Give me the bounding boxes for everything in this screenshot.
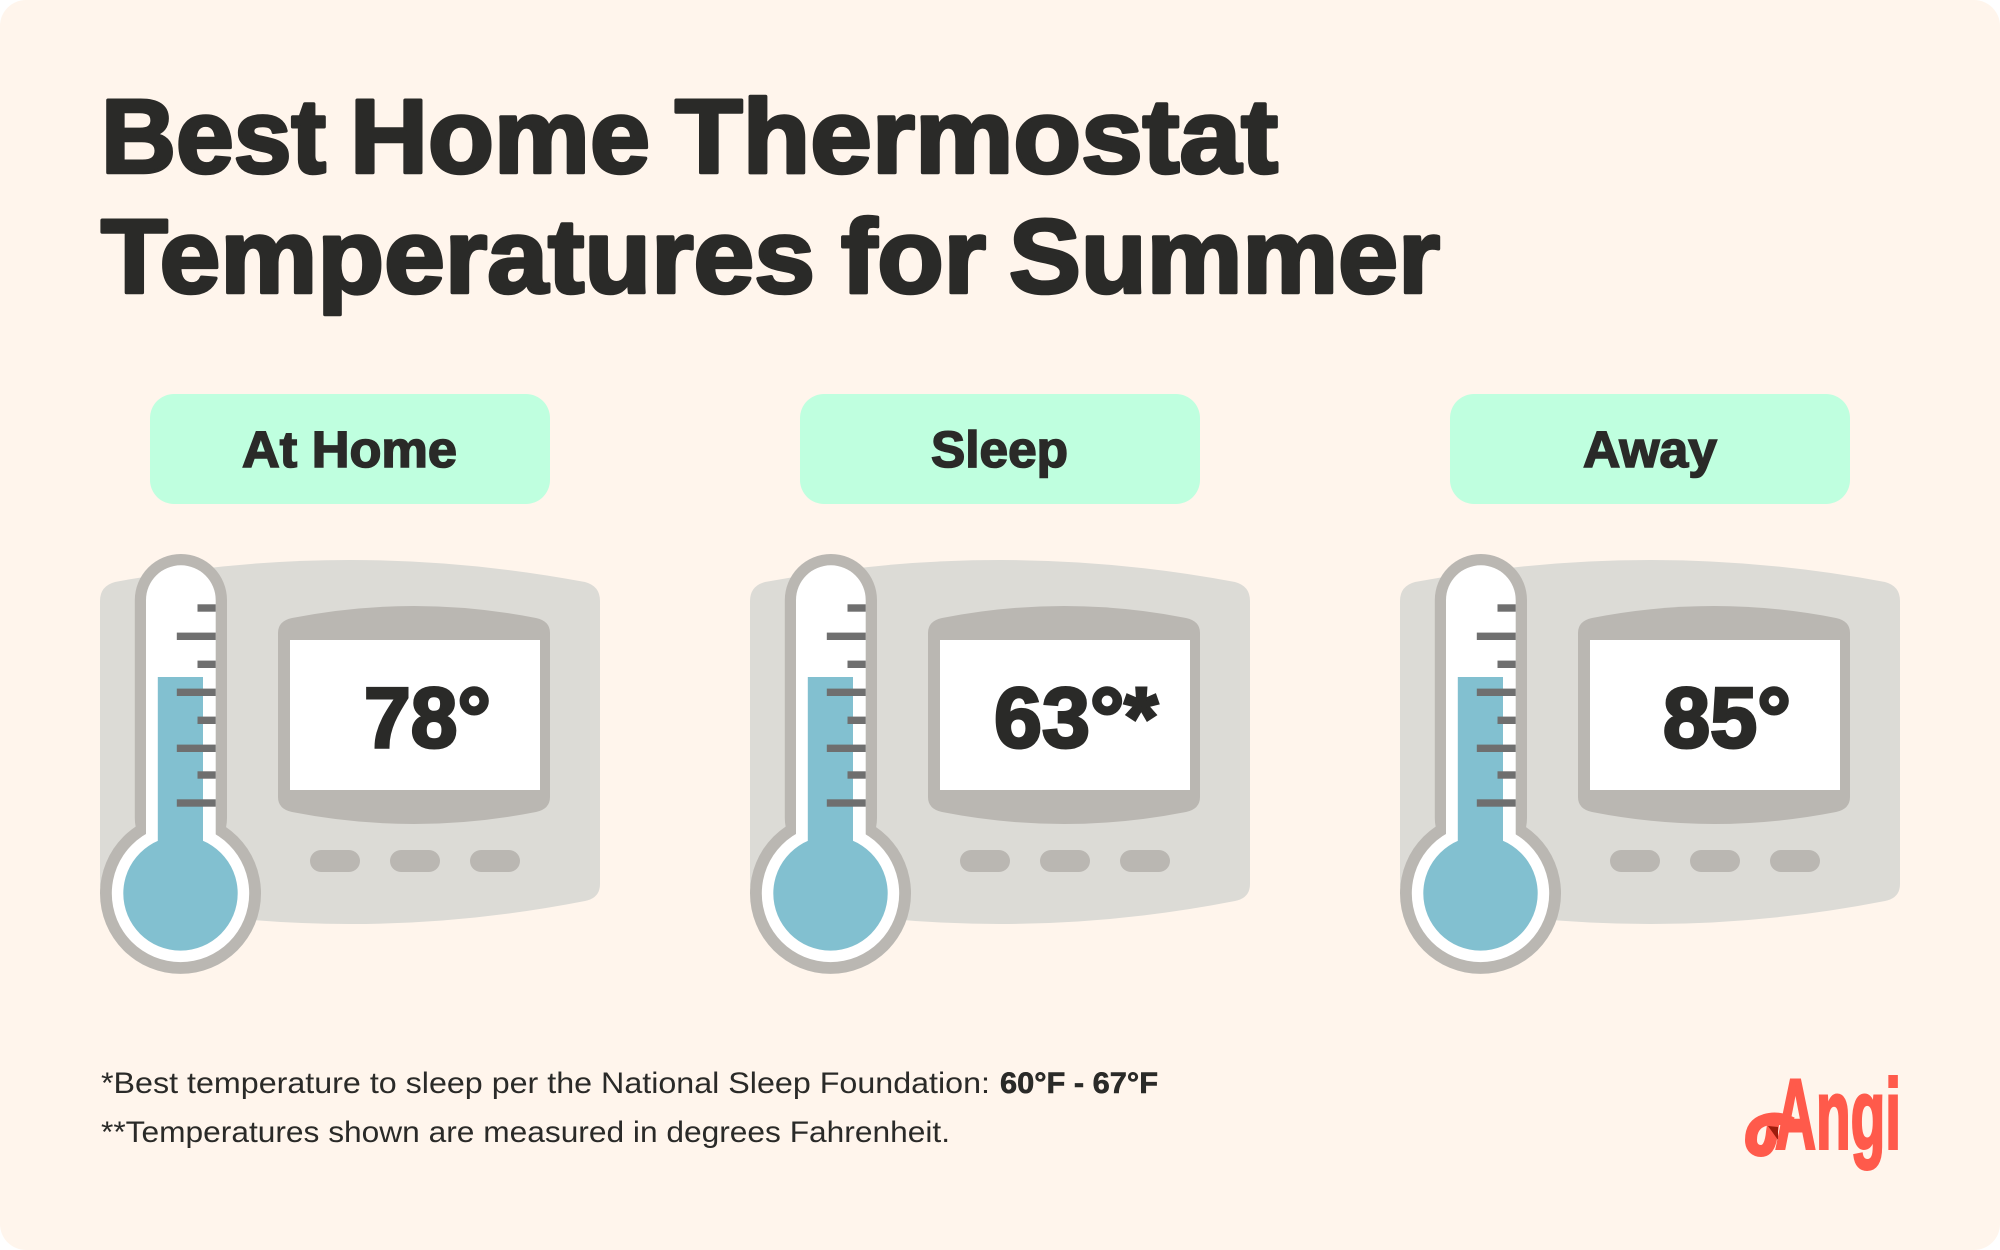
- icon: thermometer: [1400, 554, 1561, 974]
- title: Temperatures: [101, 198, 815, 315]
- label pill: at home: At Home: [242, 421, 457, 478]
- footnotes: [101, 1067, 1158, 1149]
- label pill: away: Away: [1583, 421, 1718, 478]
- logo: Angi: Angi: [1775, 1058, 1901, 1170]
- title: for: [841, 198, 986, 315]
- logo: Angi: [1751, 1058, 1901, 1170]
- temperature reading: 78: 78°: [364, 671, 491, 766]
- footnotes: **Temperatures shown are measured in degrees Fahrenheit.: [101, 1116, 950, 1149]
- label pill: away: [1450, 394, 1850, 504]
- title: Home: [350, 78, 650, 195]
- thermostat device: at home: [100, 560, 600, 924]
- temperature reading: 85: 85°: [1663, 671, 1791, 766]
- title: Thermostat: [675, 78, 1278, 195]
- panel: away: [1400, 394, 1900, 974]
- panel: sleep: [750, 394, 1250, 974]
- title: Best: [101, 78, 326, 195]
- label pill: sleep: [800, 394, 1200, 504]
- label pill: at home: [150, 394, 550, 504]
- label pill: sleep: Sleep: [931, 421, 1068, 478]
- thermostat device: away: [1400, 560, 1900, 924]
- icon: thermometer: [100, 554, 261, 974]
- footnotes: 60°F - 67°F: [1000, 1067, 1158, 1100]
- title: Summer: [1009, 198, 1440, 315]
- title: [101, 78, 1440, 315]
- icon: thermometer: [750, 554, 911, 974]
- panel: at home: [100, 394, 600, 974]
- thermostat device: sleep: [750, 560, 1250, 924]
- footnotes: *Best temperature to sleep per the National Sleep Foundation:: [101, 1067, 990, 1100]
- temperature reading: 63: 63°*: [994, 671, 1158, 766]
